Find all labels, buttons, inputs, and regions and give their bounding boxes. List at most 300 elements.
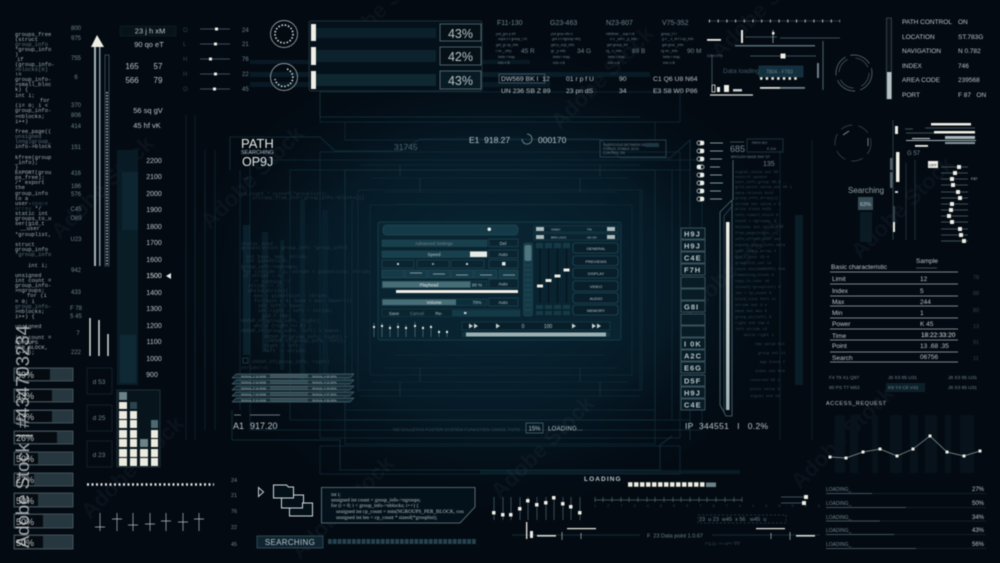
dim source code <box>241 176 370 371</box>
left number column: 7 <box>76 331 80 337</box>
left code column: group_info- <box>15 107 51 114</box>
panel: settings controls: Auto <box>498 300 508 305</box>
left code column: array */ <box>15 205 41 212</box>
data columns: C1 Q6 U8 N64 <box>653 76 698 83</box>
dim data log: grouplist_set 12 <box>735 261 772 266</box>
dim data log: copy_to_user x8 <box>735 279 770 284</box>
tunnel frame lines <box>186 92 812 474</box>
left percent bars: 39% <box>16 370 34 380</box>
code list: H9J <box>684 242 701 250</box>
left percent bars: 43% <box>16 391 34 401</box>
left number column: 414 <box>71 124 82 130</box>
left code column: NGROUPS <box>15 339 39 346</box>
heading: path searching: PATH <box>241 136 274 151</box>
panel: settings controls <box>382 225 520 316</box>
watermarks: Adobe Stock <box>846 150 959 264</box>
dim source code: while(stride){ <box>248 288 288 294</box>
dim data log: while right 1 <box>744 333 774 338</box>
mode buttons: MEMORY <box>587 308 605 313</box>
left code column: EXPORT(grou <box>15 169 51 176</box>
panel: settings controls: Del <box>500 241 506 246</box>
characteristic table: Power <box>832 321 851 328</box>
scale: 1000 <box>146 356 162 363</box>
mode buttons <box>573 243 618 315</box>
dim source code: GROUP_AT(group_info, right) <box>252 359 330 365</box>
bottom left numbers: 22 <box>231 525 237 531</box>
characteristic table: Index <box>832 288 849 295</box>
slanted list: SIGNAL.2 10.0000 <box>241 374 267 378</box>
dim source code: int left = base; <box>258 303 304 309</box>
dim data log: group set 12 <box>758 351 786 356</box>
left code column: __user <box>19 225 40 232</box>
left number column: 433 <box>71 290 82 296</box>
dim source code: max = gidsetsize - stride; <box>254 293 329 299</box>
left code column: (group_info- <box>15 61 55 68</box>
code pairs: J8 X3 85 U31 <box>948 375 977 381</box>
top sliders: 21 <box>242 42 249 48</box>
scale: 900 <box>146 372 158 379</box>
mode buttons: GENERAL <box>586 246 606 251</box>
bottom centre status: NO GALLEYAS FUSTER SYSTEM FUNKSTIEN OIMGE TAPIS <box>393 427 520 432</box>
data loading widget <box>707 21 872 95</box>
loading rows: LOADING_ <box>826 542 852 548</box>
data columns <box>496 20 701 95</box>
characteristic table: Time <box>832 333 847 340</box>
left code column: ps_free); <box>15 174 45 181</box>
left code column: user-space <box>15 200 48 207</box>
characteristic table: Sample <box>916 258 938 265</box>
path control list: PORT <box>902 92 920 99</box>
dim source code: if(copy_from_user(group_info->blocks[i] <box>252 195 364 201</box>
left percent bars: 27% <box>16 475 34 485</box>
code list <box>681 228 705 410</box>
top sliders: H <box>183 57 187 63</box>
left code column: ser(gid_t <box>15 220 45 227</box>
code list: H9J <box>684 230 701 238</box>
data columns: beta r map, <box>608 55 626 59</box>
dim source code: for (stride = 1; stride < gidsetsize; stride <box>243 269 370 275</box>
scale: 1500 <box>146 273 162 280</box>
loading rows: 43% <box>972 528 985 534</box>
left code column: >blocks[0] <box>15 66 48 73</box>
data columns: rg nn _info <box>661 49 678 53</box>
dim source code: int right = left + stride; <box>258 308 333 314</box>
panel: settings controls: Playhead <box>420 282 439 288</box>
data columns: UN 236 SB Z 89 <box>501 88 551 95</box>
left code column: int i; <box>28 262 48 269</box>
left number column: 151 <box>71 145 82 151</box>
readout block: 45 hf vK <box>133 121 161 130</box>
panel: settings controls: Save <box>389 311 400 316</box>
bottom centre status: LOADING... <box>548 426 583 432</box>
code pairs: K9 Y4 C6 V42 <box>888 385 919 391</box>
bottom left numbers: 21 <box>231 493 237 499</box>
left code column: i++1); <box>15 349 35 356</box>
data columns: 45 R <box>521 48 535 55</box>
readout 685: BROUGH BASE RAY ST <box>731 155 771 159</box>
watermarks: Adobe Stock <box>396 230 509 344</box>
left number column: 416 <box>71 171 82 177</box>
left code column: *group_info <box>15 251 51 258</box>
data columns: DW569 BK I 12 <box>501 76 550 83</box>
bottom left numbers: 24 <box>231 478 237 484</box>
path control list: F 87 ON <box>958 92 986 99</box>
data point timeline: r*Δ ∆⌂ ≈≈ w*≈ ∇∇ <box>705 541 741 546</box>
left percent bars: 50% <box>16 496 34 506</box>
loading rows: LOADING_ <box>826 501 852 507</box>
watermarks: Adobe Stock <box>486 390 599 504</box>
left number column: C45 <box>70 207 82 213</box>
top status readout: SUSPICIOUS BETWEEN SIGNAL <box>603 143 654 147</box>
left number column: O89 <box>70 216 82 222</box>
panel: settings controls: Volume <box>426 300 442 305</box>
bottom left readout: 917.20 <box>250 421 278 431</box>
top sliders: 76 <box>242 57 249 63</box>
loading stripe bar: LOADING <box>584 476 622 483</box>
left code column: group_info <box>15 246 48 253</box>
loading rows: 50% <box>972 501 985 507</box>
path control list: 239568 <box>958 77 980 84</box>
left number column: F 78 <box>70 306 83 312</box>
searching dial: 63% <box>860 202 871 208</box>
path control list: ST.783G <box>958 34 983 41</box>
watermarks: Adobe Stock <box>786 380 899 494</box>
fader bank: VIDEO <box>551 228 561 232</box>
top status readout: CONTROL ON <box>603 151 625 155</box>
slanted list: SIGNAL.5 10.0000 <box>241 386 267 390</box>
left number column: 576 <box>71 192 82 198</box>
left code column: _info); <box>14 159 38 166</box>
dim data log: group_at(left) 9 <box>735 315 772 320</box>
bottom left numbers: 76 <box>231 509 237 515</box>
scale: 1400 <box>146 290 162 297</box>
characteristic table: Search <box>832 355 853 362</box>
percent panel: 43% <box>448 74 473 88</box>
slanted list: SIGNAL.4 47.00% <box>312 392 337 396</box>
loading rows <box>826 487 986 548</box>
heading: path searching: OP9J <box>242 155 273 169</box>
top sliders: 24 <box>242 28 249 34</box>
loading rows: 34% <box>972 515 985 521</box>
dim source code: GROUP_AT(group_info, right); <box>241 318 322 324</box>
left number column: 800 <box>71 26 82 32</box>
data columns: beta r map, <box>498 55 516 59</box>
dim data log: base set max 0 <box>735 309 768 314</box>
scale: 1100 <box>146 339 162 346</box>
code callout: unsigned int count = group_info->ngroups; <box>331 496 421 504</box>
mode buttons: VIDEO <box>590 284 602 289</box>
scale <box>117 150 171 385</box>
panel: settings controls: Re- <box>435 311 443 316</box>
dim data log: export group_info.data <box>735 243 786 248</box>
play icon <box>258 488 264 496</box>
dim data log: free_page(block, x) <box>735 231 778 236</box>
left code column: i++) { <box>15 313 35 320</box>
searching bar: SEARCHING <box>265 538 315 547</box>
loading stripe bar <box>584 476 716 487</box>
bar matrix <box>117 390 160 467</box>
dim data log: map block 7 <box>760 360 785 365</box>
left code column: for (i <box>27 292 48 299</box>
dim source code: GROUP_AT(group_info, left); <box>268 338 346 344</box>
scale: 1800 <box>146 224 162 231</box>
readout block: 566 <box>125 76 139 85</box>
left code column: groups_free <box>15 31 51 38</box>
path control list: 746 <box>958 63 969 70</box>
ruler <box>594 497 825 508</box>
loading rows: 56% <box>972 542 985 548</box>
code list: H9J <box>684 388 701 398</box>
left code column: static int <box>15 210 48 217</box>
fader bank <box>534 226 618 315</box>
left number column: 755 <box>71 56 82 62</box>
heading: path searching: SEARCHING <box>241 150 274 156</box>
scale: 2200 <box>146 158 162 165</box>
characteristic table: Basic characteristic <box>831 264 888 271</box>
scale: 1600 <box>146 257 162 264</box>
central control panel <box>373 222 621 340</box>
data point timeline <box>512 522 820 546</box>
dim data log: reserved 00 1 <box>750 378 780 383</box>
readout block: 57 <box>154 62 163 71</box>
dim data log: alloc block 0x81 <box>735 207 772 212</box>
scale: 2000 <box>146 191 162 198</box>
characteristic table: 1 <box>920 310 924 317</box>
dim data log: stride set 3 o <box>735 303 768 308</box>
dim data log: len = cp_count 0 <box>735 291 772 296</box>
left code column: unsigned <box>15 323 41 330</box>
characteristic table: 13 .68 .35 <box>920 343 949 350</box>
scale: 2100 <box>146 174 162 181</box>
data point timeline: F 23 Data point 1.0.67 <box>647 534 703 540</box>
bottom left numbers <box>231 478 237 548</box>
left code column: group_info <box>15 190 48 197</box>
code callout: unsigned int len = cp_count * sizeof(*grouplist); <box>336 514 438 521</box>
dim source code: GROUP_AT(group_info, left) > tmpst: <box>241 328 342 334</box>
readout block: 90 qo eT <box>134 40 164 49</box>
left code column: *grouplist, <box>15 231 51 238</box>
right mini sliders <box>781 495 808 505</box>
scale: 1300 <box>146 306 162 313</box>
searching dial <box>835 125 884 242</box>
code list: C4E <box>684 400 702 410</box>
characteristic table: 06756 <box>920 354 938 361</box>
d boxes: d 53 <box>93 379 106 386</box>
bracket readout <box>698 515 786 523</box>
data columns: F11-130 <box>497 20 523 27</box>
left code column: unsigned <box>15 272 41 279</box>
scale: 1900 <box>146 207 162 214</box>
characteristic table: Max <box>832 299 845 306</box>
left code column: struct <box>15 241 35 248</box>
characteristic table: 244 <box>920 299 931 306</box>
scale: 1200 <box>146 323 162 330</box>
path control list: PATH CONTROL <box>902 19 952 26</box>
loading rows: LOADING_ <box>826 528 852 534</box>
code list: G8I <box>684 302 699 312</box>
dim source code: stride /= 3; <box>248 283 283 289</box>
left code column: long)group_ <box>15 138 52 145</box>
dim data log: signal end x0 <box>750 394 780 399</box>
transport controls <box>462 322 610 337</box>
readout 685: K.114 <box>767 147 776 151</box>
left code column: groups_to_u <box>15 215 51 222</box>
data columns: g x _ x_nt t t up_info <box>662 37 694 41</box>
data columns: oups x t group_i nt <box>498 37 527 41</box>
mode buttons: PREVIEWS <box>585 259 607 264</box>
panel: settings controls: 90 % <box>472 282 482 288</box>
watermarks: Adobe Stock <box>546 20 659 134</box>
left code column: != <box>15 71 22 78</box>
data loading widget: Data loading <box>723 68 760 75</box>
searching bar <box>257 536 476 548</box>
left percent bars: 50% <box>16 538 34 548</box>
code callout: int i; <box>331 492 341 498</box>
dim data log: data->blocks 0x1F <box>735 191 774 196</box>
data columns: nfd3mer _ oup t nt <box>606 32 634 36</box>
adobe stock id: Adobe Stock | #434703234 <box>12 325 33 548</box>
slanted list <box>232 374 354 402</box>
data columns: 90 <box>619 76 627 83</box>
data columns: put grou nfo n <box>551 32 573 36</box>
left code column: kfree(group <box>15 154 51 161</box>
panel: settings controls: Auto <box>498 282 508 286</box>
code list: A2C <box>684 352 702 360</box>
code callout <box>322 488 475 523</box>
readout block: 23 j h xM <box>135 26 165 36</box>
data columns: info n B <box>608 61 621 65</box>
left code column: *group_info <box>15 46 51 53</box>
dim data log: grid.point.value_set 00 1 <box>735 185 793 190</box>
data columns: 34 G <box>577 48 591 55</box>
code pairs: F4 T9 X1 Q97 <box>829 375 859 381</box>
data loading widget: 0294 07% <box>707 54 723 58</box>
watermarks: Adobe Stock <box>286 450 399 563</box>
mode buttons: AUDIO <box>590 296 602 301</box>
data columns: get_gr up_info <box>496 43 518 47</box>
right bars and knobs: OFF <box>929 162 938 168</box>
readout block: 56 sq gV <box>133 106 163 115</box>
dim source code: u6 <box>243 176 249 182</box>
data columns: got x t rtgroup nfo) <box>552 37 581 41</box>
panel: settings controls: Speed <box>427 252 441 257</box>
left code column: group_info- <box>15 76 51 83</box>
code pairs: 80 PS T7 M53 <box>829 385 860 391</box>
dim data log: left stride x3 <box>735 327 768 332</box>
dim data log: group_info.array[i] <box>735 196 778 201</box>
path control list: N 0.782 <box>958 48 981 55</box>
top sliders: O <box>183 87 188 93</box>
path control list: INDEX <box>902 63 923 70</box>
characteristic table: Limit <box>832 276 846 283</box>
readout 685: PATH NO <box>752 141 767 145</box>
top sliders: 45 <box>242 87 249 93</box>
dim data log: gid_t_user 33 0 <box>735 255 770 260</box>
dotted level line <box>87 483 214 486</box>
top status readout: E1 918.27 <box>469 135 510 145</box>
left code column: the <box>15 184 25 191</box>
left code column: int count = <box>15 277 51 284</box>
percent panel: 42% <box>448 50 473 64</box>
long vertical gauge <box>720 160 733 416</box>
data columns: info n B <box>663 61 676 65</box>
dim source code: int gidsetsize; <box>246 258 289 264</box>
dim source code: int base, max, stride; <box>246 254 309 260</box>
loading rows: 27% <box>972 487 985 493</box>
loading rows: LOADING_ <box>826 515 852 521</box>
dim source code: stride/=3; <box>241 365 270 371</box>
fader bank: TIN <box>587 228 592 232</box>
watermarks: Adobe Stock <box>76 410 189 524</box>
dim data log: count = ngroups, x <box>735 219 777 224</box>
small faders <box>373 322 448 337</box>
top status readout: 31745 <box>394 142 418 152</box>
bracket readout: 23 u 23 w45 x 56 w45 u <box>699 517 766 523</box>
left code column: info->block <box>15 143 52 150</box>
data columns: E3 S8 W0 P86 <box>653 88 698 95</box>
searching dial: Searching <box>848 186 884 195</box>
dim source code: GROUP_AT(group_info, right) = <box>264 334 348 340</box>
data columns: info n B <box>553 61 566 65</box>
dim data log: right set tmp 0 <box>735 321 770 326</box>
slanted list: SIGNAL.8 10.0000 <box>241 398 267 402</box>
panel: settings controls: Auto <box>498 252 508 257</box>
watermarks: Adobe Stock <box>196 120 309 234</box>
ring dials <box>270 20 298 90</box>
data columns: get p_oup_info <box>551 43 574 47</box>
data columns: N23-807 <box>606 20 633 27</box>
code list: I 0K <box>684 340 702 348</box>
d boxes <box>87 368 112 467</box>
dim data log: control.update <box>735 175 768 180</box>
slanted list: SIGNAL.7 10.0000 <box>241 392 267 396</box>
left code column: >ngroups; <box>15 287 45 294</box>
dim data log: sizeof(*grouplist) 6 <box>735 285 781 290</box>
left code column: group_info- <box>15 303 51 310</box>
top sliders: H <box>183 72 187 78</box>
dim source code: gid_t tmp; <box>262 313 291 319</box>
data columns: 34 <box>619 88 627 95</box>
left code column: for <box>40 97 50 104</box>
readout block: 79 <box>154 76 163 85</box>
watermarks: Adobe Stock <box>46 130 159 244</box>
left code column: } <box>15 164 18 171</box>
bottom centre status <box>393 423 583 433</box>
left code column: (i= 0; i < <box>15 102 48 109</box>
data columns: gr _p info <box>551 49 566 53</box>
altitude arrow gauge <box>90 35 109 356</box>
readout block: 165 <box>125 62 139 71</box>
dim source code: static void <box>241 241 273 247</box>
bottom left readout <box>233 415 280 431</box>
path control list: LOCATION <box>902 34 935 41</box>
top status readout <box>394 134 666 157</box>
fader bank: BRN LOCK <box>551 236 566 240</box>
characteristic table: K 45 <box>920 321 934 328</box>
transport controls: 100 <box>544 324 552 330</box>
readout block <box>120 26 176 130</box>
percent panel: 43% <box>448 27 473 41</box>
left number column: 942 <box>71 268 82 274</box>
dim data log: index set 0x3 <box>755 369 785 374</box>
left code column: group_info <box>15 41 48 48</box>
data columns: put_gro p inf <box>496 32 515 36</box>
panel: settings controls: Cancel <box>410 311 424 316</box>
left number column <box>70 26 83 356</box>
code list: F7H <box>684 266 701 274</box>
dim source code: for(base = 0; base < max; base++){ <box>254 298 352 304</box>
dim source code: groups(struct group_info *group_info) <box>241 245 348 251</box>
